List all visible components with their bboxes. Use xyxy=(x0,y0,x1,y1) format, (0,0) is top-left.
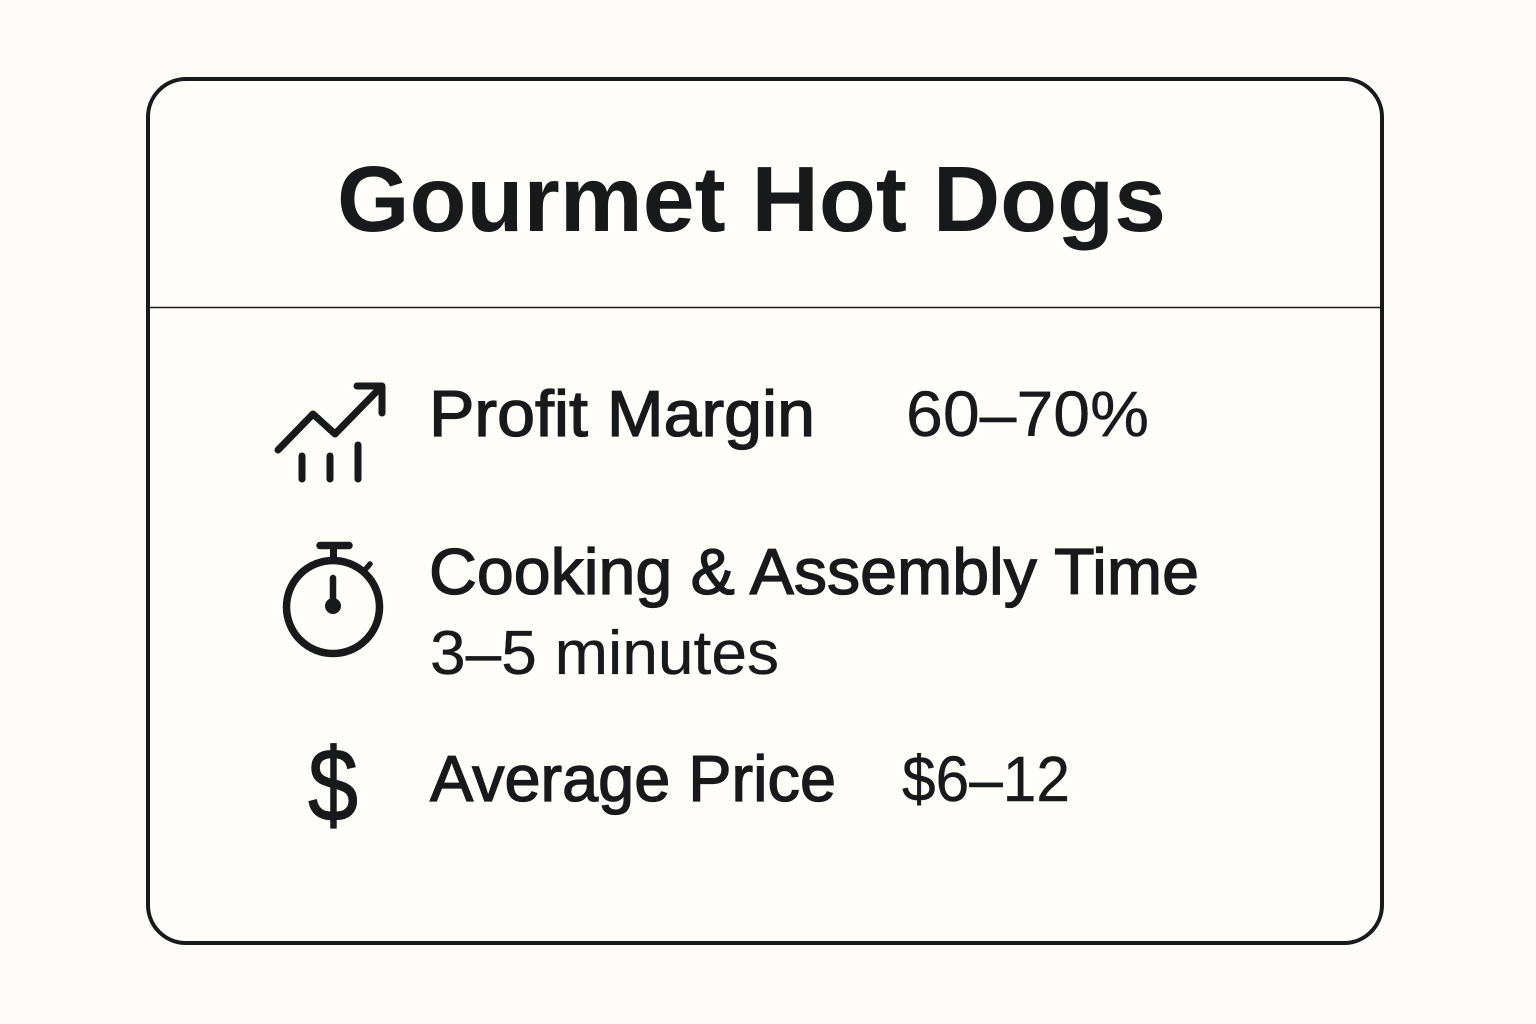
value: profit margin: 60–70% xyxy=(906,378,1149,450)
value: cooking time: 3–5 minutes xyxy=(430,619,779,688)
icon: dollar sign: $ xyxy=(308,727,358,843)
title: Gourmet Hot Dogs xyxy=(337,147,1166,251)
label: profit margin: Profit Margin xyxy=(429,377,815,450)
icon: rising chart xyxy=(278,386,382,479)
label: cooking and assembly time: Cooking & Assembly Time xyxy=(429,535,1199,608)
label: average price: Average Price xyxy=(430,742,836,815)
icon: stopwatch xyxy=(286,546,380,654)
panel: card xyxy=(148,79,1382,943)
value: average price: $6–12 xyxy=(902,743,1070,815)
